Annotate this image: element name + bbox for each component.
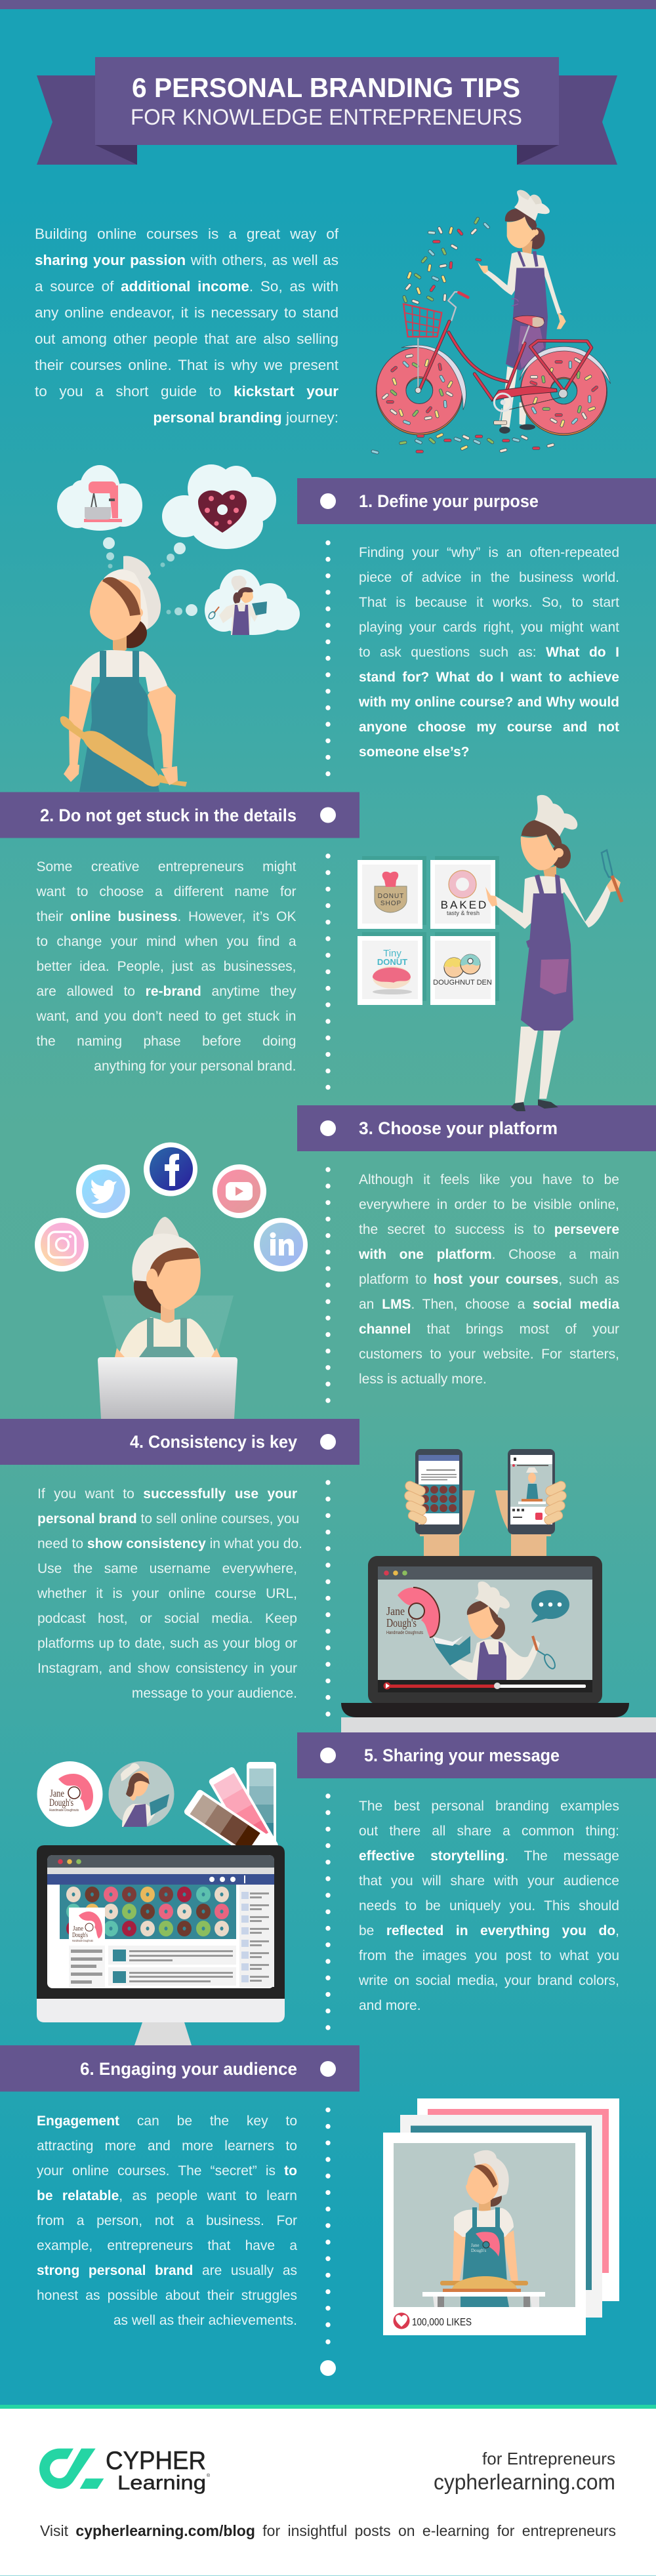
section 3 text: the secret to success is to persevere bbox=[359, 1222, 619, 1237]
section 2 text: are allowed to re-brand anytime they bbox=[37, 984, 296, 999]
screen: brand logo: Jane bbox=[386, 1605, 405, 1618]
profile logo: Dough's bbox=[72, 1931, 88, 1939]
photo stack illustration bbox=[383, 2098, 619, 2335]
photo: chef rolling dough bbox=[422, 2150, 545, 2307]
dotted connector 4 bbox=[325, 1480, 331, 1717]
section 3 bar: 3. Choose your platform bbox=[359, 1118, 558, 1138]
mini chef bbox=[207, 575, 267, 635]
intro paragraph: any online endeavor, it is necessary to stand bbox=[35, 304, 338, 321]
section 2 text: want, and you don’t need to get stuck in bbox=[37, 1009, 297, 1024]
footer panel bbox=[0, 2409, 656, 2576]
card: doughnut den: DOUGHNUT DEN bbox=[433, 979, 492, 987]
section 1 text: stand for? What do I want to achieve bbox=[359, 670, 619, 685]
thought bubbles bbox=[103, 537, 197, 616]
section 3 bar bbox=[297, 1105, 656, 1151]
rear donut bbox=[520, 348, 607, 436]
section 4 text: whether it is your online course URL, bbox=[37, 1586, 297, 1601]
section 2 text: to change your mind when you find a bbox=[37, 934, 297, 949]
icon: youtube bbox=[213, 1164, 266, 1218]
card: donut shop: DONUT bbox=[378, 893, 404, 900]
section 5 text: that you will share with your audience bbox=[359, 1873, 619, 1889]
screen: brand logo: Handmade Doughnuts bbox=[386, 1631, 423, 1635]
icon: instagram bbox=[35, 1217, 89, 1271]
hair bbox=[505, 209, 537, 230]
footer logo: Learning bbox=[117, 2471, 206, 2494]
intro paragraph: their courses online. That is why we present bbox=[35, 357, 338, 373]
bicycle seat bbox=[514, 316, 544, 327]
shelf bbox=[341, 1717, 656, 1732]
apron bbox=[506, 268, 548, 371]
section 2 text: anything for your personal brand. bbox=[94, 1059, 297, 1074]
menu and posts bbox=[69, 1946, 236, 1988]
sidebar bbox=[239, 1885, 274, 1987]
section 1 text: playing your cards right, you might want bbox=[359, 620, 619, 635]
bun bbox=[527, 228, 545, 249]
phone: instagram post bbox=[508, 1449, 555, 1534]
laptop back bbox=[98, 1357, 237, 1419]
speech bubble bbox=[531, 1590, 569, 1623]
screen: brand logo: Dough's bbox=[386, 1616, 417, 1629]
section 2 bar: 2. Do not get stuck in the details bbox=[40, 806, 297, 825]
section 2 text: their online business. However, it’s OK bbox=[37, 909, 297, 924]
cloud: mini chef bbox=[205, 569, 300, 635]
dotted connector 1 bbox=[325, 541, 331, 776]
icon: facebook bbox=[144, 1143, 197, 1196]
card: donut shop bbox=[358, 860, 422, 929]
card: baked bbox=[430, 860, 495, 929]
section 4 text: Use the same username everywhere, bbox=[37, 1561, 297, 1576]
section 1 bar bbox=[297, 478, 656, 524]
footer accent strip bbox=[0, 2405, 656, 2409]
title text: 6 PERSONAL BRANDING TIPS bbox=[132, 72, 520, 103]
section 3 text bbox=[359, 1172, 619, 1387]
section 1 text: piece of advice in the business world. bbox=[359, 570, 619, 585]
section 6 bar: 6. Engaging your audience bbox=[80, 2059, 297, 2079]
section 2 text: Some creative entrepreneurs might bbox=[37, 859, 297, 874]
chef with rolling pin bbox=[60, 556, 187, 792]
intro paragraph: Building online courses is a great way of bbox=[35, 226, 338, 242]
fingers bbox=[403, 1480, 567, 1526]
section 4 text: Instagram, and show consistency in your bbox=[37, 1661, 297, 1676]
likes counter: 100,000 LIKES bbox=[412, 2317, 472, 2328]
bicycle fenders bbox=[401, 345, 611, 410]
icon: heart donut bbox=[198, 491, 247, 533]
section 4 text: need to show consistency in what you do. bbox=[37, 1536, 302, 1551]
profile logo: Handmade Doughnuts bbox=[72, 1939, 94, 1942]
section 6 text: be relatable, as people want to learn bbox=[37, 2188, 297, 2203]
neck bbox=[522, 241, 533, 255]
icon: twitter bbox=[76, 1164, 130, 1218]
section 5 text: be reflected in everything you do, bbox=[359, 1923, 619, 1938]
bottom edge line bbox=[0, 2575, 656, 2576]
laptop bbox=[341, 1556, 629, 1717]
card: tiny donut: Tiny bbox=[383, 948, 401, 959]
intro paragraph: a source of additional income. So, as with bbox=[35, 278, 338, 295]
dotted connector 2 bbox=[325, 853, 331, 1090]
thought illustration: chef imagining bbox=[57, 464, 300, 792]
section 4 text: platforms up to date, such as your blog or bbox=[37, 1636, 297, 1651]
hands bbox=[478, 262, 566, 329]
shirt and arms bbox=[484, 252, 562, 314]
color swatch fan bbox=[183, 1762, 279, 1864]
footer call to action: Visit cypherlearning.com/blog for insightful posts on e-learning for entrepreneurs bbox=[40, 2522, 616, 2539]
section 1 text: Finding your “why” is an often-repeated bbox=[359, 545, 619, 560]
section 6 text: example, entrepreneurs that have a bbox=[37, 2238, 297, 2253]
sprinkles bbox=[371, 216, 598, 455]
section 4 text: podcast host, or social media. Keep bbox=[37, 1611, 297, 1626]
branding illustration bbox=[37, 1761, 285, 2045]
section 1 text bbox=[358, 545, 619, 760]
section 6 text: your online courses. The “secret” is to bbox=[37, 2163, 297, 2178]
hands and arms bbox=[420, 1490, 551, 1557]
intro paragraph: to you a short guide to kickstart your bbox=[35, 383, 338, 399]
dotted connector 6 bbox=[320, 2108, 336, 2376]
footer website: cypherlearning.com bbox=[434, 2470, 615, 2494]
section 6 text: from a person, not a business. For bbox=[37, 2213, 297, 2228]
footer logo: ® bbox=[207, 2473, 211, 2478]
section 3 text: platform to host your courses, such as bbox=[359, 1272, 619, 1287]
section 4 bar bbox=[0, 1419, 359, 1465]
section 5 text bbox=[359, 1799, 619, 2013]
subtitle text: FOR KNOWLEDGE ENTREPRENEURS bbox=[131, 105, 522, 130]
section 1 text: to ask questions such as: What do I bbox=[359, 645, 619, 660]
bicycle frame bbox=[418, 292, 592, 422]
section 6 text: attracting more and more learners to bbox=[37, 2138, 297, 2153]
cloud: heart donut bbox=[162, 464, 276, 549]
top bar bbox=[0, 0, 656, 9]
intro paragraph: sharing your passion with others, as well as bbox=[35, 252, 338, 268]
chef pointing at logos bbox=[485, 795, 622, 1111]
hero illustration: chef with donut bicycle bbox=[371, 190, 611, 455]
dotted connector 3 bbox=[325, 1167, 331, 1403]
chef portrait circle bbox=[109, 1761, 174, 1827]
section 4 text: message to your audience. bbox=[132, 1686, 297, 1701]
brand logo circle: Jane bbox=[50, 1788, 64, 1799]
section 5 text: from the images you post to what you bbox=[359, 1948, 619, 1963]
section 4 text: personal brand to sell online courses, you bbox=[37, 1511, 299, 1526]
card: tiny donut bbox=[358, 936, 422, 1005]
phone: facebook feed bbox=[415, 1449, 462, 1534]
profile logo bbox=[69, 1908, 105, 1944]
brand logo circle bbox=[37, 1761, 102, 1827]
photo: chef rolling dough: Dough's bbox=[471, 2248, 486, 2253]
logo wordmark: CYPHER bbox=[106, 2447, 206, 2475]
legs bbox=[501, 366, 527, 428]
section 5 text: out there all share a common thing: bbox=[359, 1824, 619, 1839]
face bbox=[507, 216, 536, 248]
section 1 text: with my online course? and Why would bbox=[359, 695, 619, 710]
section 1 text: anyone choose my course and not bbox=[359, 720, 619, 735]
section 2 text: want to choose a different name for bbox=[37, 884, 297, 899]
section 6 text: Engagement can be the key to bbox=[37, 2114, 297, 2128]
section 5 bar bbox=[297, 1732, 656, 1778]
section 5 text: The best personal branding examples bbox=[359, 1799, 619, 1814]
section 2 text: the naming phase before doing bbox=[37, 1034, 297, 1049]
intro paragraph: out among other people that are also selling bbox=[35, 331, 338, 347]
section 3 text: an LMS. Then, choose a social media bbox=[359, 1297, 619, 1312]
section 3 text: channel that brings most of your bbox=[359, 1322, 619, 1337]
section 5 text: effective storytelling. The message bbox=[359, 1849, 619, 1864]
section 3 text: customers to your website. For starters, bbox=[359, 1347, 619, 1362]
icon: linkedin bbox=[254, 1217, 308, 1271]
section 1 bar: 1. Define your purpose bbox=[359, 491, 539, 511]
section 6 bar bbox=[0, 2045, 359, 2091]
section 5 text: and more. bbox=[359, 1998, 421, 2013]
screen: chef teaching bbox=[433, 1582, 557, 1680]
social media illustration bbox=[35, 1143, 308, 1419]
photo: chef rolling dough: Jane bbox=[471, 2243, 479, 2248]
card: tiny donut: DONUT bbox=[377, 957, 407, 967]
intro paragraph: personal branding journey: bbox=[153, 409, 338, 426]
cover photo donuts bbox=[66, 1887, 229, 1936]
footer logo bbox=[39, 2447, 211, 2494]
screen: brand logo bbox=[386, 1587, 440, 1637]
icon: stand mixer bbox=[84, 481, 122, 522]
section 4 bar: 4. Consistency is key bbox=[130, 1432, 297, 1452]
section 5 text: write on social media, your brand colors, bbox=[359, 1973, 619, 1988]
bicycle basket bbox=[403, 304, 441, 337]
section 5 bar: 5. Sharing your message bbox=[364, 1746, 560, 1765]
front donut bbox=[376, 348, 462, 435]
title banner bbox=[37, 57, 617, 165]
light beam bbox=[102, 1296, 234, 1357]
card: doughnut den bbox=[430, 936, 495, 1005]
profile logo: Jane bbox=[73, 1925, 83, 1932]
section 5 text: needs to be uniquely you. This should bbox=[359, 1898, 619, 1913]
section 1 text: someone else’s? bbox=[359, 745, 469, 760]
logo mark bbox=[39, 2449, 104, 2489]
chef hat bbox=[514, 190, 550, 221]
section 2 bar bbox=[0, 792, 359, 838]
section 3 text: everywhere in order to be visible online, bbox=[359, 1197, 619, 1212]
section 4 text: If you want to successfully use your bbox=[37, 1486, 297, 1502]
section 3 text: with one platform. Choose a main bbox=[359, 1247, 619, 1262]
section 1 text: That is because it works. So, to start bbox=[359, 595, 619, 610]
section 6 text bbox=[37, 2114, 298, 2327]
section 2 text: better idea. People, just as businesses, bbox=[37, 959, 297, 974]
section 6 text: strong personal brand are usually as bbox=[37, 2263, 297, 2278]
section 6 text: honest as possible about their struggles bbox=[37, 2288, 297, 2302]
dotted connector 5 bbox=[325, 1793, 331, 2030]
section 3 text: Although it feels like you have to be bbox=[359, 1172, 619, 1187]
card: baked: tasty & fresh bbox=[447, 910, 480, 916]
brand logo circle: Dough's bbox=[49, 1797, 73, 1809]
section 3 text: less is actually more. bbox=[359, 1372, 487, 1387]
section 6 text: as well as their achievements. bbox=[113, 2313, 297, 2327]
phones and laptop illustration bbox=[341, 1449, 656, 1732]
card: baked: BAKED bbox=[441, 899, 488, 911]
chef at laptop bbox=[115, 1217, 220, 1357]
desktop monitor bbox=[37, 1845, 285, 2045]
cloud: mixer bbox=[57, 465, 142, 531]
footer tagline: for Entrepreneurs bbox=[482, 2449, 615, 2468]
brand logo circle: Handmade Doughnuts bbox=[49, 1809, 79, 1812]
intro paragraph bbox=[35, 226, 338, 426]
card shadows bbox=[362, 856, 499, 1001]
logo cards bbox=[358, 856, 499, 1005]
card: donut shop: SHOP bbox=[380, 900, 401, 907]
section 2 text bbox=[37, 859, 297, 1074]
icon: heart badge bbox=[394, 2313, 409, 2329]
section 4 text bbox=[37, 1486, 302, 1701]
